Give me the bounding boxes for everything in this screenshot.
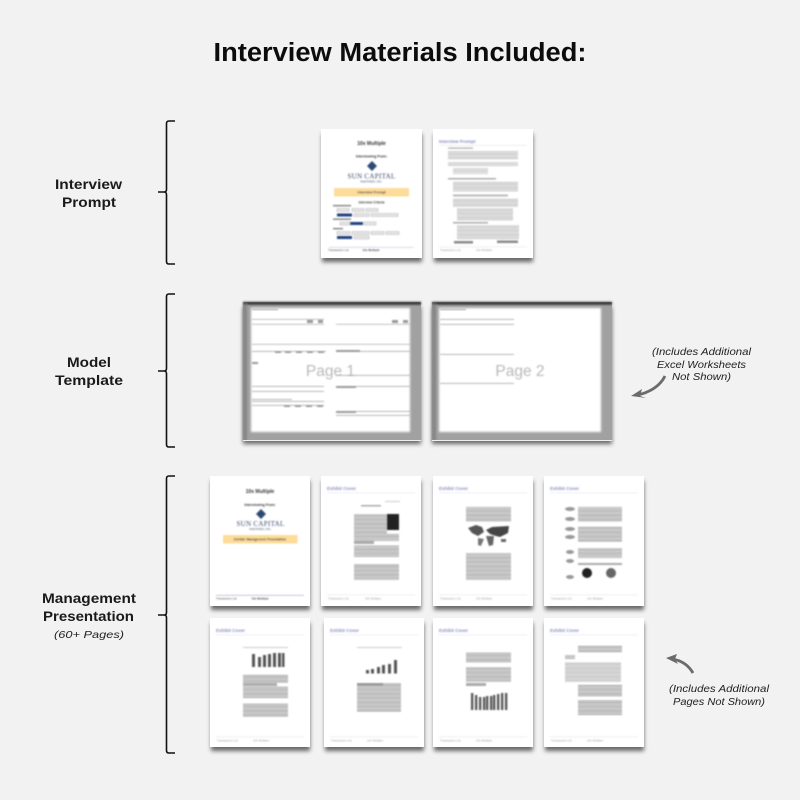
page: management presentation table: Transaction Ltd xyxy=(551,738,572,742)
page: management presentation world map xyxy=(433,476,533,610)
page: interview prompt cover: Interview Criteria xyxy=(359,200,385,204)
page: management presentation logos and pie charts: 10x Multiple xyxy=(587,596,603,600)
section label: Management Presentation: Presentation xyxy=(43,608,134,624)
page: management presentation logos and pie charts xyxy=(544,476,644,610)
section label: Management Presentation: (60+ Pages) xyxy=(54,629,124,641)
page: management presentation column chart: 10x Multiple xyxy=(476,738,492,742)
page: management presentation bar chart flat: 10x Multiple xyxy=(253,738,269,742)
note: additional excel worksheets xyxy=(652,346,752,383)
page: management presentation cover: Interviewing From: xyxy=(244,503,276,507)
page: management presentation column chart: Exhibit Cover xyxy=(439,628,468,633)
page: interview prompt text xyxy=(433,129,533,262)
page: management presentation bar chart rising: Exhibit Cover xyxy=(330,628,359,633)
page: management presentation table xyxy=(544,618,644,751)
page: management presentation cover: Exhibit: Management Presentation xyxy=(234,538,286,542)
bracket: Management Presentation xyxy=(158,476,175,753)
section label: Interview Prompt: Interview xyxy=(55,176,122,192)
section label: Model Template xyxy=(55,354,123,388)
page: interview prompt cover: 10x Multiple xyxy=(357,141,386,147)
page: management presentation cover: PARTNERS, INC. xyxy=(249,527,272,532)
bracket: Interview Prompt xyxy=(158,121,175,264)
page: management presentation cover xyxy=(210,476,310,610)
page: management presentation cover: 10x Multiple xyxy=(251,596,269,600)
page: management presentation cover: SUN CAPITAL xyxy=(236,520,285,528)
page: management presentation bar chart rising: 10x Multiple xyxy=(367,738,383,742)
page: interview prompt cover: Transaction Ltd xyxy=(328,248,349,252)
arrow: to model template xyxy=(631,376,665,398)
page: management presentation bar chart flat xyxy=(210,618,310,751)
section label: Management Presentation xyxy=(42,590,136,641)
page: management presentation world map: Exhibit Cover xyxy=(439,486,468,491)
page: management presentation world map: 10x Multiple xyxy=(476,596,492,600)
note: additional pages: (Includes Additional xyxy=(669,683,770,695)
page: model template page 2: Page 2 xyxy=(495,363,545,380)
arrow: to management pages xyxy=(666,654,693,673)
page: management presentation bar chart rising xyxy=(324,618,424,751)
page: management presentation table: 10x Multiple xyxy=(587,738,603,742)
page: model template page 1: Page 1 xyxy=(306,363,355,380)
page: interview prompt text: Interview Prompt xyxy=(439,139,476,144)
page: management presentation text and image xyxy=(321,476,421,610)
page: management presentation column chart: Transaction Ltd xyxy=(440,738,461,742)
title: Interview Materials Included: xyxy=(214,39,586,67)
section label: Model Template: Template xyxy=(55,372,123,388)
page: interview prompt cover: Interview Prompt xyxy=(357,190,387,194)
page: management presentation bar chart rising: Transaction Ltd xyxy=(331,738,352,742)
note: additional pages xyxy=(669,683,770,708)
page: management presentation text and image: Exhibit Cover xyxy=(327,486,356,491)
page: management presentation bar chart flat: Transaction Ltd xyxy=(217,738,238,742)
page: interview prompt cover: 10x Multiple xyxy=(362,248,380,252)
page: management presentation column chart xyxy=(433,618,533,751)
page: interview prompt cover xyxy=(321,129,422,262)
page: management presentation bar chart flat: Exhibit Cover xyxy=(216,628,245,633)
page: management presentation logos and pie charts: Exhibit Cover xyxy=(550,486,579,491)
note: additional pages: Pages Not Shown) xyxy=(673,696,765,708)
page: management presentation text and image: Transaction Ltd xyxy=(328,596,349,600)
page: model template page 1 xyxy=(243,302,421,444)
page: management presentation logos and pie charts: Transaction Ltd xyxy=(551,596,572,600)
page: interview prompt cover: PARTNERS, INC. xyxy=(360,180,383,184)
page: model template page 2 xyxy=(432,302,612,444)
page: interview prompt cover: Interviewing From: xyxy=(356,154,387,158)
page: interview prompt cover: SUN CAPITAL xyxy=(347,172,396,180)
section label: Model Template: Model xyxy=(67,354,111,370)
note: additional excel worksheets: Not Shown) xyxy=(672,371,731,383)
bracket: Model Template xyxy=(158,294,175,447)
page: interview prompt text: Transaction Ltd xyxy=(440,248,461,252)
section label: Management Presentation: Management xyxy=(42,590,136,606)
page: interview prompt text: 10x Multiple xyxy=(476,248,492,252)
section label: Interview Prompt: Prompt xyxy=(62,194,116,210)
note: additional excel worksheets: Excel Worksheets xyxy=(657,359,747,371)
note: additional excel worksheets: (Includes Additional xyxy=(652,346,752,358)
page: management presentation text and image: 10x Multiple xyxy=(365,596,381,600)
page: management presentation table: Exhibit Cover xyxy=(550,628,579,633)
page: management presentation world map: Transaction Ltd xyxy=(440,596,461,600)
page: management presentation cover: Transaction Ltd xyxy=(216,596,237,600)
section label: Interview Prompt xyxy=(55,176,122,210)
page: management presentation cover: 10x Multiple xyxy=(246,489,275,495)
